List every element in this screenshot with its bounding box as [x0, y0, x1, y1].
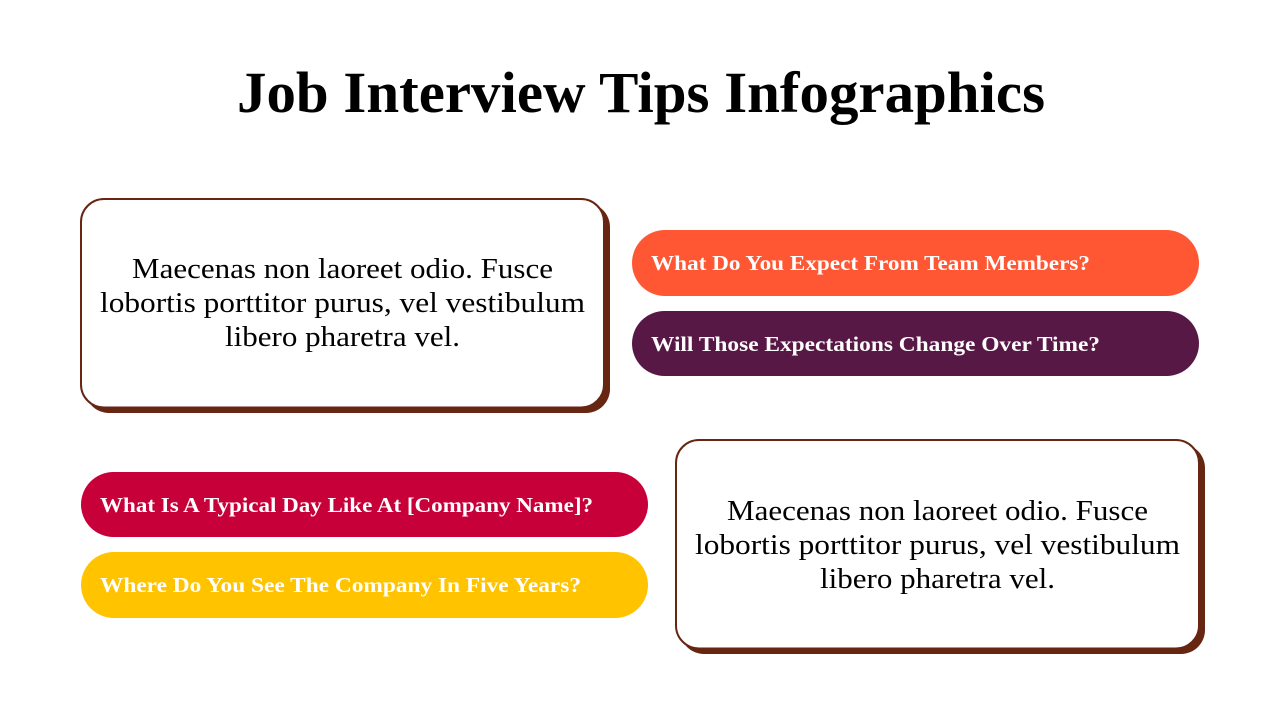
pill: team members question	[632, 230, 1199, 296]
pill: expectations question: Will Those Expectations Change Over Time?	[651, 332, 1100, 356]
pill: team members question: What Do You Expect From Team Members?	[651, 251, 1090, 275]
pill: five years question: Where Do You See The Company In Five Years?	[100, 573, 581, 597]
panel: bottom-right text card	[676, 440, 1205, 654]
panel: top-left text card: Maecenas non laoreet odio. Fusce	[132, 254, 553, 285]
title: Job Interview Tips Infographics	[237, 60, 1045, 125]
pill: typical day question: What Is A Typical Day Like At [Company Name]?	[100, 493, 593, 517]
panel: top-left text card	[81, 199, 610, 413]
pill: five years question	[81, 552, 648, 618]
panel: top-left text card: libero pharetra vel.	[225, 322, 460, 353]
panel: bottom-right text card: Maecenas non laoreet odio. Fusce	[727, 496, 1148, 527]
pill: expectations question	[632, 311, 1199, 376]
panel: bottom-right text card: lobortis porttitor purus, vel vestibulum	[695, 530, 1180, 561]
panel: top-left text card: lobortis porttitor purus, vel vestibulum	[100, 288, 585, 319]
pill: typical day question	[81, 472, 648, 537]
panel: bottom-right text card: libero pharetra vel.	[820, 564, 1055, 595]
